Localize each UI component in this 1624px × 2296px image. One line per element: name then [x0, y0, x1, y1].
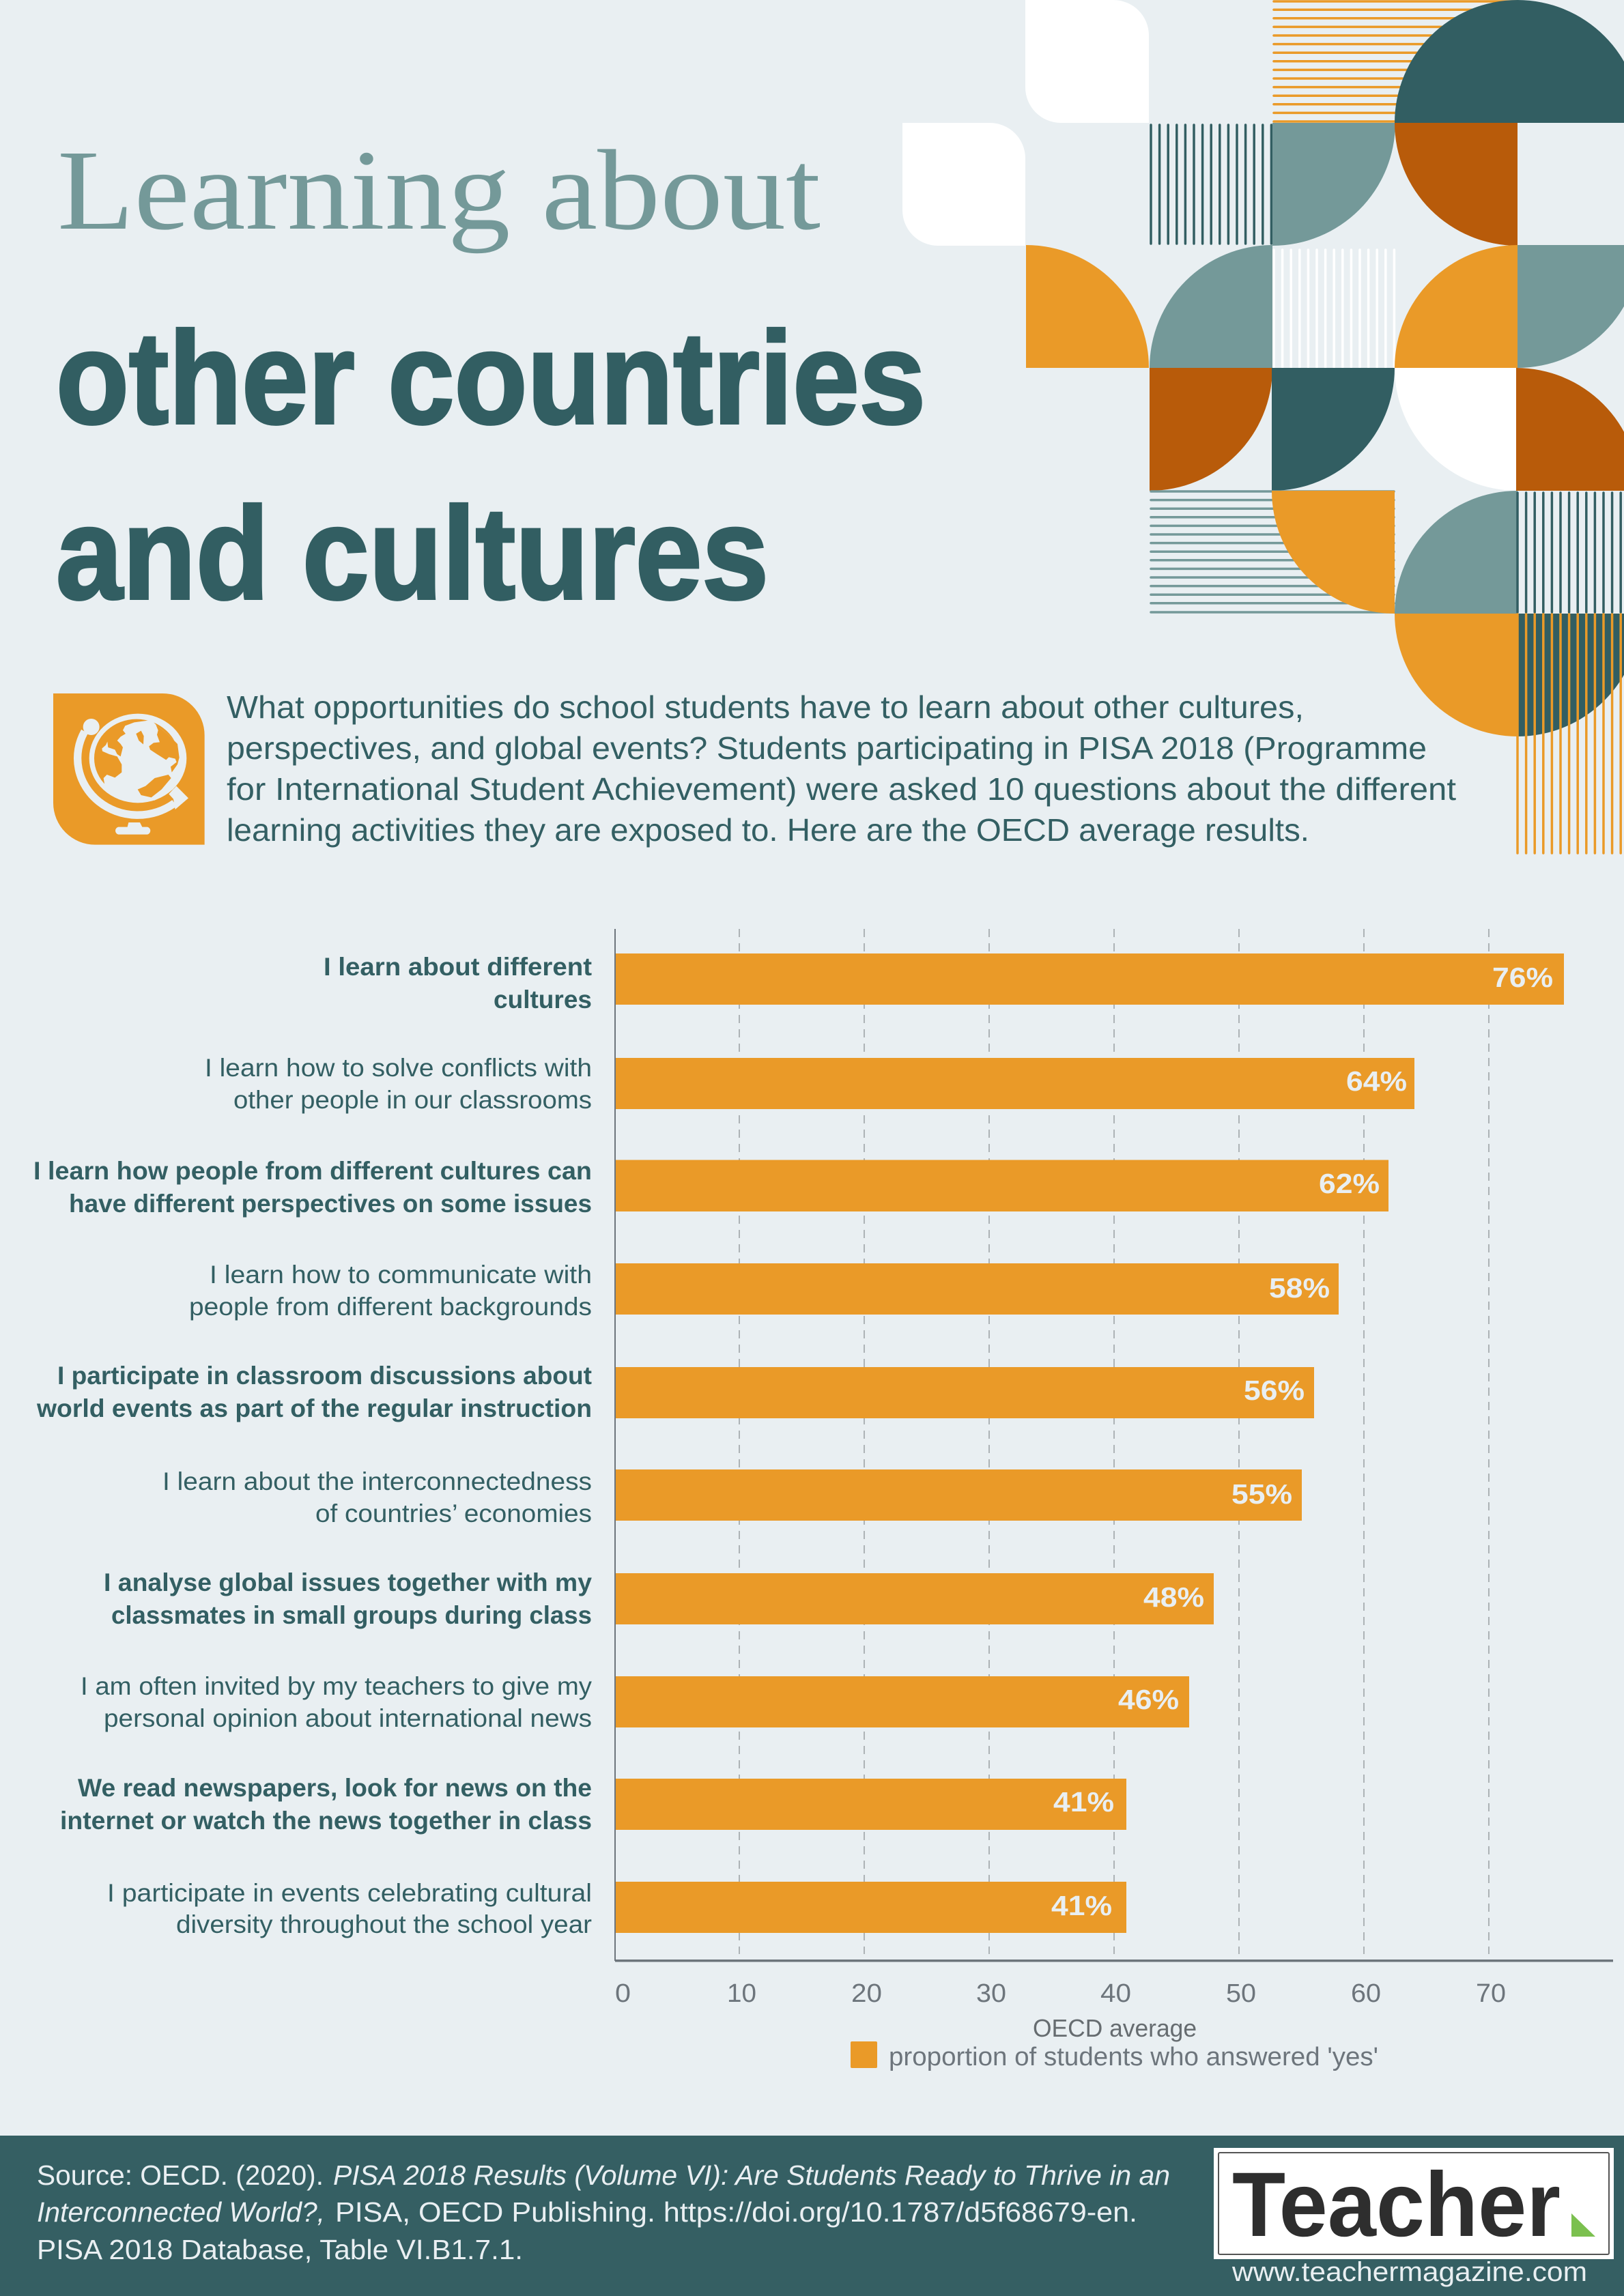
- bar: cultural diversity 41%: 41%: [1051, 1890, 1112, 1921]
- bar: news in class 41%: [60, 1774, 1126, 1835]
- bar: solve conflicts 64%: [205, 1054, 1414, 1114]
- bar: solve conflicts 64%: I learn how to solve conflicts with: [205, 1054, 592, 1082]
- bar: cultural diversity 41%: diversity throughout the school year: [176, 1910, 592, 1938]
- bar: different cultures 76%: 76%: [1492, 962, 1553, 993]
- bar chart: [33, 929, 1613, 2071]
- bar: communicate 58%: 58%: [1269, 1272, 1330, 1304]
- bar: cultural diversity 41%: [107, 1879, 1126, 1938]
- bar: global issues 48%: [104, 1568, 1214, 1629]
- bar: interconnectedness 55%: of countries’ economies: [315, 1499, 592, 1527]
- intro text: What opportunities do school students have to learn about other cultures,: [227, 689, 1304, 725]
- source text: Source: OECD. (2020).: [37, 2159, 324, 2191]
- bar: global issues 48%: classmates in small groups during class: [111, 1601, 592, 1629]
- bar: different perspectives 62%: I learn how people from different cultures can: [33, 1157, 592, 1185]
- x axis labels: 0: [615, 1979, 631, 2008]
- bar: classroom discussions 56%: world events as part of the regular instruction: [36, 1394, 592, 1422]
- bar: communicate 58%: I learn how to communicate with: [210, 1261, 592, 1289]
- bar: news in class 41%: 41%: [1053, 1786, 1114, 1818]
- bar: personal opinion 46%: [81, 1672, 1189, 1732]
- bar: interconnectedness 55%: [162, 1467, 1302, 1527]
- intro text: for International Student Achievement) were asked 10 questions about the different: [227, 771, 1456, 807]
- x axis labels: 50: [1226, 1979, 1256, 2008]
- title: [56, 127, 926, 627]
- bar: classroom discussions 56%: 56%: [1244, 1375, 1305, 1406]
- bar: personal opinion 46%: personal opinion about international news: [104, 1704, 592, 1732]
- title: other countries: [56, 304, 926, 451]
- source text: PISA 2018 Database, Table VI.B1.7.1.: [37, 2234, 523, 2265]
- x axis labels: [615, 1979, 1506, 2008]
- bar: solve conflicts 64%: 64%: [1346, 1065, 1407, 1097]
- intro text: learning activities they are exposed to. Here are the OECD average results.: [227, 812, 1309, 848]
- bar: different perspectives 62%: have different perspectives on some issues: [69, 1190, 592, 1218]
- x axis labels: 40: [1100, 1979, 1131, 2008]
- geometric pattern decoration: [902, 0, 1624, 853]
- bar: global issues 48%: I analyse global issues together with my: [104, 1568, 592, 1596]
- bar: classroom discussions 56%: I participate in classroom discussions about: [57, 1362, 592, 1390]
- bar: news in class 41%: We read newspapers, look for news on the: [78, 1774, 592, 1802]
- title: and cultures: [56, 480, 769, 627]
- bar: personal opinion 46%: I am often invited by my teachers to give my: [81, 1672, 593, 1700]
- source text: Interconnected World?,: [37, 2196, 325, 2228]
- axis title: OECD average: [1033, 2014, 1197, 2042]
- bar: different cultures 76%: [324, 953, 1564, 1014]
- source text: PISA, OECD Publishing. https://doi.org/10.1787/d5f68679-en.: [335, 2196, 1137, 2228]
- bar: communicate 58%: people from different backgrounds: [189, 1293, 592, 1321]
- bar: different cultures 76%: I learn about different: [324, 953, 592, 981]
- bar: news in class 41%: internet or watch the news together in class: [60, 1807, 592, 1835]
- legend: proportion of students who answered 'yes': [889, 2043, 1378, 2071]
- source text: PISA 2018 Results (Volume VI): Are Students Ready to Thrive in an: [333, 2159, 1170, 2191]
- logo: Teacher: Teacher: [1232, 2154, 1561, 2256]
- x axis labels: 30: [976, 1979, 1006, 2008]
- bar: global issues 48%: 48%: [1143, 1581, 1204, 1613]
- bar: classroom discussions 56%: [36, 1362, 1314, 1422]
- intro text: perspectives, and global events? Students participating in PISA 2018 (Programme: [227, 730, 1427, 766]
- bar: interconnectedness 55%: 55%: [1231, 1478, 1292, 1510]
- bar: interconnectedness 55%: I learn about the interconnectedness: [162, 1467, 592, 1495]
- bar: different perspectives 62%: [33, 1157, 1388, 1218]
- source text: [37, 2159, 1170, 2265]
- icon: globe: [53, 693, 205, 845]
- x axis labels: 70: [1476, 1979, 1506, 2008]
- bar: solve conflicts 64%: other people in our classrooms: [233, 1086, 592, 1114]
- bar: different cultures 76%: cultures: [494, 986, 592, 1014]
- x axis labels: 10: [727, 1979, 756, 2008]
- intro text: [227, 689, 1456, 848]
- x axis labels: 20: [851, 1979, 882, 2008]
- bar: communicate 58%: [189, 1261, 1339, 1321]
- bar: personal opinion 46%: 46%: [1118, 1684, 1179, 1715]
- bar: cultural diversity 41%: I participate in events celebrating cultural: [107, 1879, 592, 1907]
- footer band: [0, 2136, 1624, 2296]
- website url: www.teachermagazine.com: [1231, 2257, 1587, 2287]
- title: Learning about: [57, 127, 821, 254]
- bar: different perspectives 62%: 62%: [1319, 1168, 1380, 1199]
- x axis labels: 60: [1351, 1979, 1381, 2008]
